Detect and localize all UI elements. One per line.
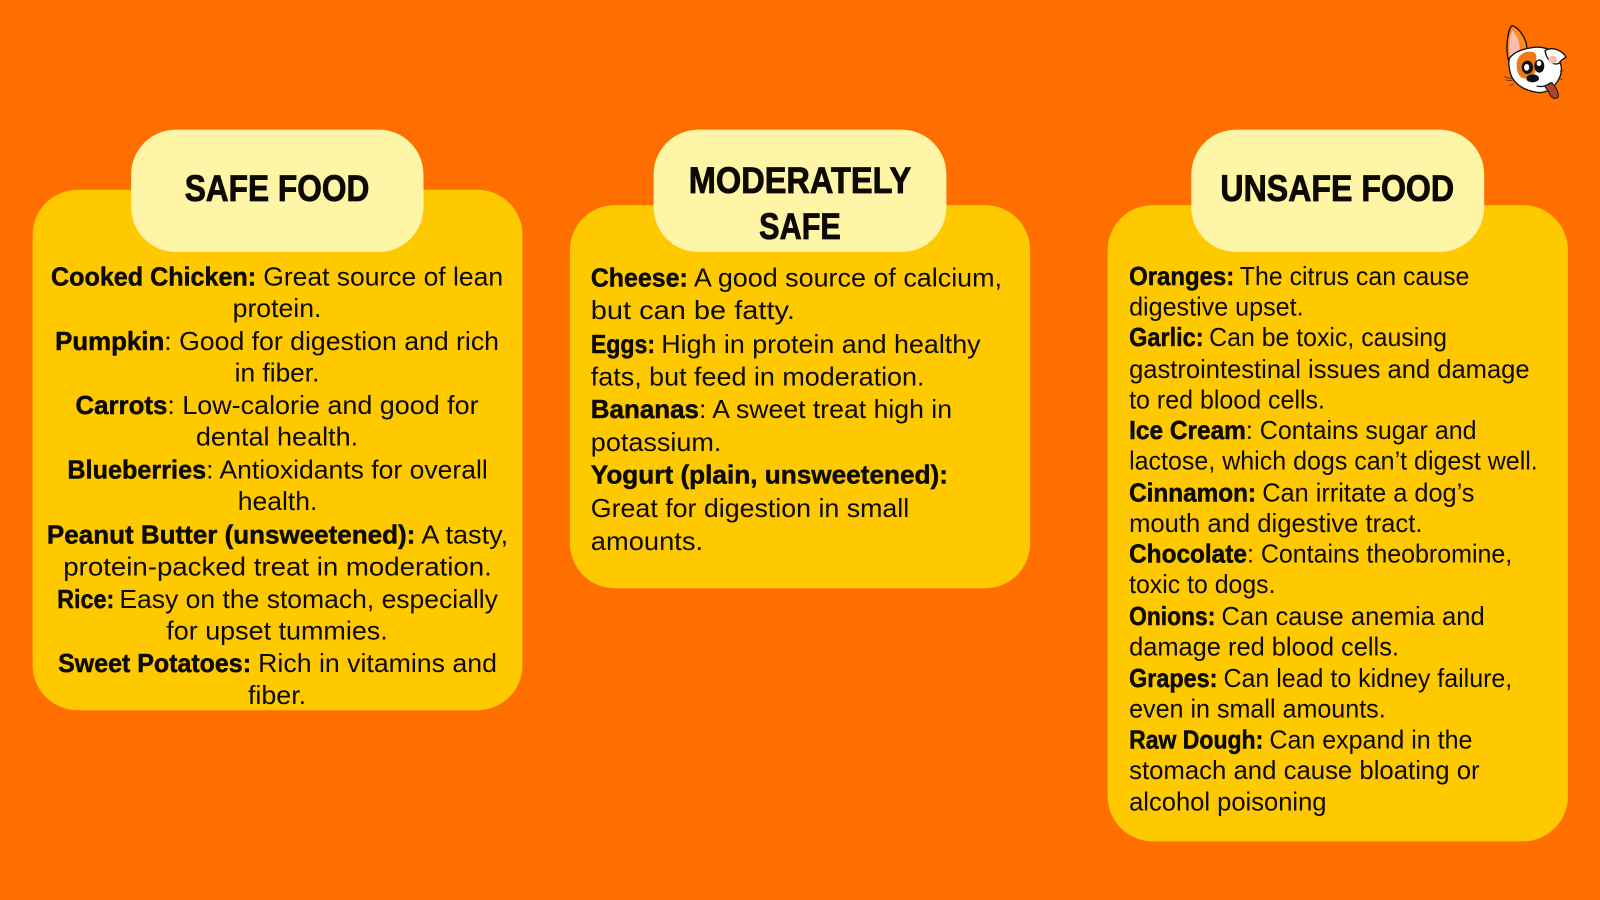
unsafe food list: The citrus can cause	[1240, 263, 1469, 291]
moderately safe list	[591, 265, 1002, 556]
unsafe food heading tab	[1191, 130, 1484, 252]
safe food list: for upset tummies.	[166, 618, 388, 646]
safe food list: Easy on the stomach, especially	[119, 586, 498, 614]
unsafe food list: Grapes:	[1129, 665, 1217, 693]
unsafe food list	[1129, 263, 1538, 817]
panel: moderately safe	[570, 130, 1030, 588]
unsafe food list: Can cause anemia and	[1221, 603, 1485, 631]
unsafe food list: Oranges:	[1129, 263, 1234, 291]
unsafe food list: alcohol poisoning	[1129, 789, 1327, 817]
moderately safe list: amounts.	[591, 528, 703, 556]
safe food list: fiber.	[248, 682, 306, 710]
moderately safe card background	[570, 205, 1030, 588]
icon: dog logo	[1504, 26, 1566, 98]
safe food list: A tasty,	[421, 522, 508, 550]
safe food list: : Antioxidants for overall	[206, 456, 488, 484]
unsafe food card background	[1108, 205, 1568, 841]
unsafe food list: Can lead to kidney failure,	[1223, 665, 1512, 693]
safe food list: Carrots	[76, 392, 167, 420]
safe food list: Pumpkin	[55, 328, 164, 356]
unsafe food list: mouth and digestive tract.	[1129, 510, 1422, 538]
safe food list: Sweet Potatoes:	[58, 650, 251, 678]
panel: unsafe food	[1108, 130, 1568, 841]
safe food heading tab: SAFE FOOD	[185, 168, 369, 209]
safe food heading tab	[131, 130, 423, 252]
safe food list: health.	[238, 488, 317, 516]
unsafe food list: gastrointestinal issues and damage	[1129, 356, 1530, 384]
safe food list: Rich in vitamins and	[258, 650, 497, 678]
moderately safe list: Bananas	[591, 396, 699, 424]
unsafe food list: toxic to dogs.	[1129, 571, 1276, 599]
unsafe food list: digestive upset.	[1129, 294, 1304, 322]
unsafe food list: Can irritate a dog’s	[1262, 479, 1474, 507]
safe food card background	[33, 190, 522, 710]
safe food list: Blueberries	[67, 456, 206, 484]
unsafe food list: Onions:	[1129, 603, 1215, 631]
safe food list: Peanut Butter (unsweetened):	[47, 522, 415, 550]
safe food list: protein-packed treat in moderation.	[63, 553, 492, 581]
unsafe food list: Chocolate	[1129, 541, 1247, 569]
unsafe food list: damage red blood cells.	[1129, 633, 1399, 661]
safe food list: Cooked Chicken:	[51, 264, 256, 292]
moderately safe list: Eggs:	[591, 331, 655, 359]
unsafe food list: : Contains theobromine,	[1247, 541, 1512, 569]
moderately safe list: fats, but feed in moderation.	[591, 364, 924, 392]
moderately safe heading tab: MODERATELY	[689, 160, 911, 201]
moderately safe list: Great for digestion in small	[591, 495, 909, 523]
moderately safe list: Cheese:	[591, 265, 688, 293]
moderately safe list: High in protein and healthy	[661, 331, 981, 359]
moderately safe list: A good source of calcium,	[694, 265, 1002, 293]
unsafe food list: stomach and cause bloating or	[1129, 757, 1480, 785]
moderately safe list: potassium.	[591, 429, 721, 457]
safe food list: dental health.	[196, 424, 358, 452]
safe food list: : Good for digestion and rich	[164, 328, 499, 356]
safe food list: in fiber.	[235, 359, 319, 387]
safe food list: Rice:	[57, 586, 114, 614]
unsafe food list: Raw Dough:	[1129, 726, 1263, 754]
safe food list: Great source of lean	[263, 264, 503, 292]
panel: safe food	[33, 130, 522, 710]
unsafe food list: even in small amounts.	[1129, 696, 1386, 724]
unsafe food heading tab: UNSAFE FOOD	[1220, 168, 1454, 209]
unsafe food list: to red blood cells.	[1129, 386, 1325, 414]
safe food list	[47, 264, 508, 710]
unsafe food list: Garlic:	[1129, 324, 1204, 352]
moderately safe list: : A sweet treat high in	[699, 396, 952, 424]
moderately safe list: Yogurt (plain, unsweetened):	[591, 461, 948, 489]
unsafe food list: Can be toxic, causing	[1209, 324, 1447, 352]
moderately safe list: but can be fatty.	[591, 297, 795, 325]
unsafe food list: : Contains sugar and	[1246, 417, 1477, 445]
safe food list: : Low-calorie and good for	[167, 392, 479, 420]
unsafe food list: Ice Cream	[1129, 417, 1246, 445]
moderately safe heading tab: SAFE	[759, 206, 841, 247]
unsafe food list: Can expand in the	[1269, 726, 1472, 754]
unsafe food list: lactose, which dogs can’t digest well.	[1129, 448, 1538, 476]
safe food list: protein.	[233, 295, 321, 323]
moderately safe heading tab	[654, 130, 946, 252]
unsafe food list: Cinnamon:	[1129, 479, 1256, 507]
